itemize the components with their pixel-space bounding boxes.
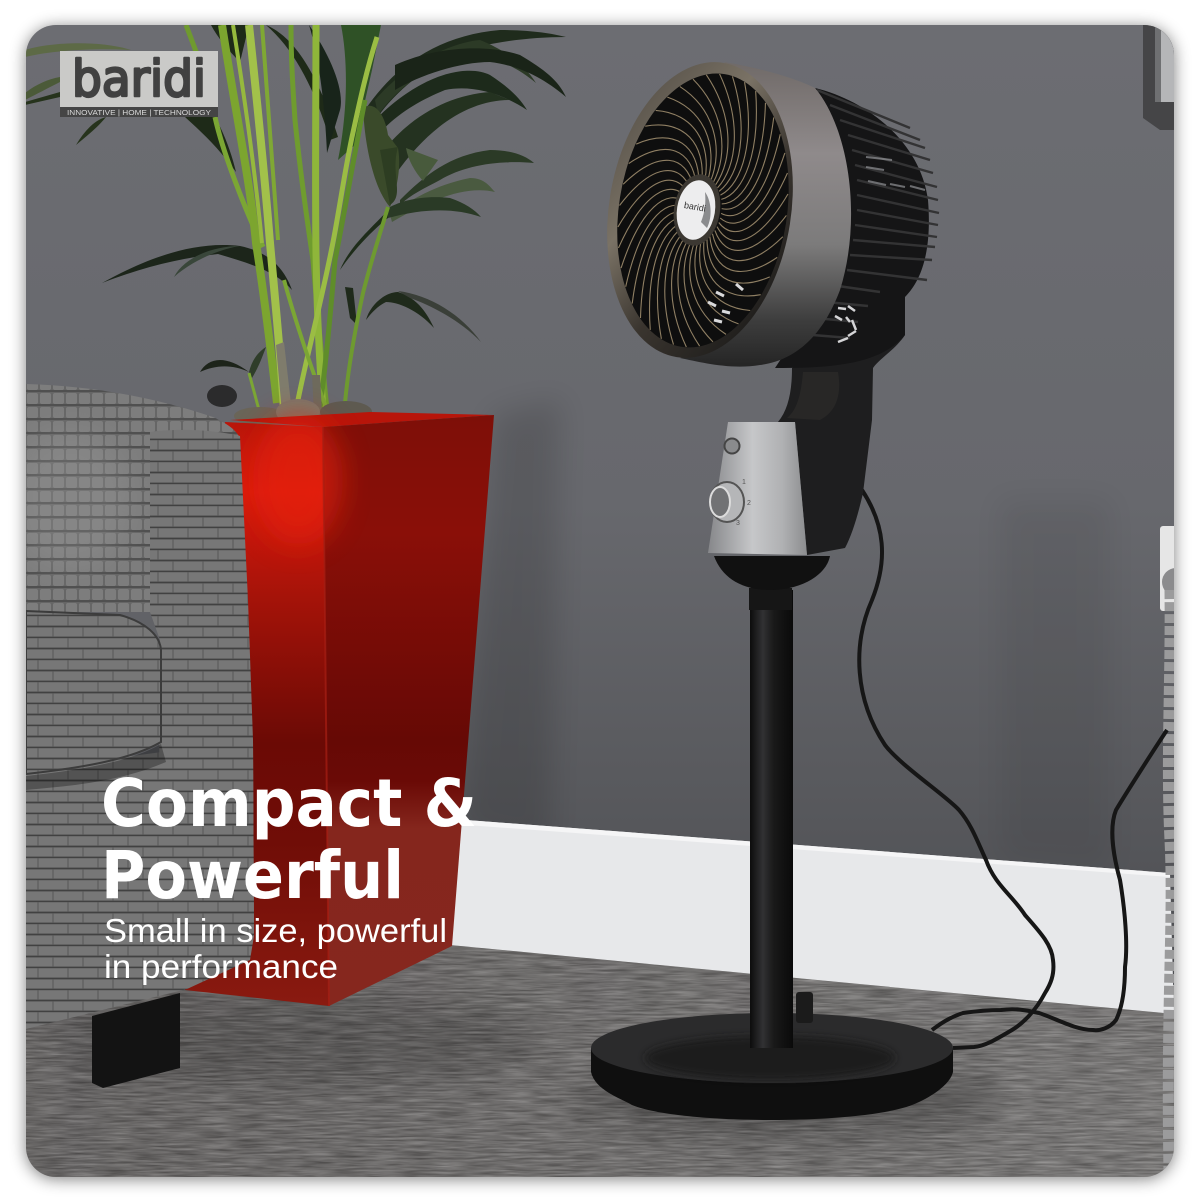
fan hub: baridi [683,200,707,214]
title: Compact & [101,765,477,842]
title: Powerful [101,837,404,914]
logo plate [60,51,218,107]
sofa legs [92,993,180,1088]
fan base [591,1013,953,1120]
fan [587,49,953,1120]
control housing [708,422,807,555]
fan hub [669,171,725,249]
control housing: 3 [736,520,740,527]
lower white flecks [835,306,856,342]
sofa [10,384,254,1088]
pole [750,590,793,1048]
lower right fronds [366,292,434,328]
grille blades [599,62,807,359]
mid fronds [400,150,534,205]
face rim [587,49,813,371]
sofa arm top [26,384,240,612]
coiled white cable [1168,590,1171,1172]
top dark leaves [211,25,249,62]
wall [26,25,1174,985]
sofa arm front [150,430,254,936]
trunks and stones [207,342,372,425]
silver band [680,62,851,367]
green stems [186,25,388,410]
base shadow [580,1060,1000,1140]
corner highlight [323,427,329,1006]
small lower leaf [200,360,249,372]
planter side face [323,415,494,1006]
neck and rear housing [778,300,905,555]
plant [25,25,566,425]
hub chrome reflection [701,192,711,228]
sofa front [26,740,254,1029]
arm highlight [26,432,132,566]
carpet shadow [60,995,540,1085]
planter inner rim [230,412,494,427]
speed dial [710,482,744,522]
dial numbers: 1 [742,479,746,486]
planter glow [253,415,343,545]
control housing: 2 [747,500,751,507]
skirting top lip [440,818,1170,877]
cables [859,490,1167,1048]
neck highlight [787,372,839,420]
grille light flecks [708,284,743,322]
skirting board [440,818,1174,1016]
base knob [796,992,813,1023]
cushion shadow [26,744,166,790]
logo [60,50,218,117]
subtitle: in performance [104,948,338,985]
left fronds behind logo [25,43,131,57]
seat cushion [26,611,161,774]
planter front face [185,422,329,1006]
power button [724,438,740,454]
mains socket [1160,526,1174,611]
top right fronds [368,30,566,113]
logo wordmark: baridi [72,50,206,108]
dark palm leaves [25,25,566,378]
head bowl [714,556,830,590]
rear cage [775,88,939,368]
picture frame [1143,25,1174,130]
carpet [26,940,1174,1177]
grille [598,61,808,360]
broad leaves [363,106,399,207]
fan face [587,49,813,371]
subtitle: Small in size, powerful [104,912,447,949]
pole collar [749,588,792,610]
cage openings [866,157,925,190]
subtitle [104,912,447,985]
logo strapline: INNOVATIVE | HOME | TECHNOLOGY [67,108,211,117]
title [101,765,477,914]
large left leaf [102,245,292,290]
red planter [185,412,494,1006]
